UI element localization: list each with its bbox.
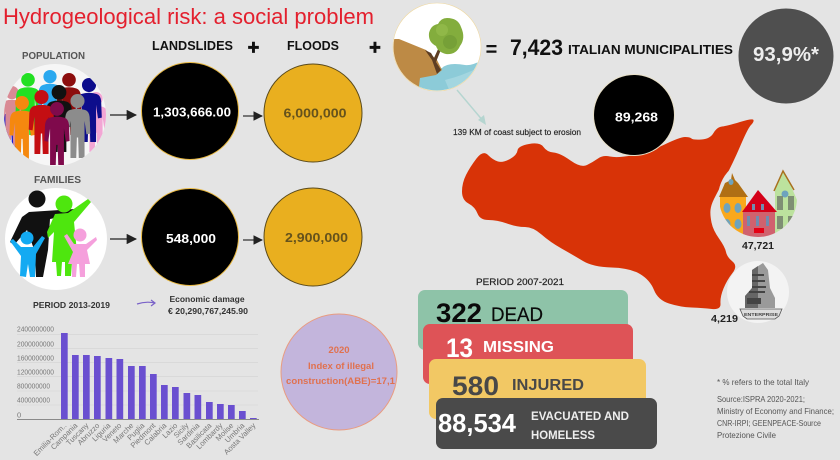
bar chart: economic damage by region	[17, 324, 259, 458]
equals sign: =	[486, 39, 497, 61]
bar chart: economic damage by region: Campania	[49, 420, 80, 452]
circle: families landslides: 548,000	[166, 231, 216, 246]
circle: illegal construction index: construction(ABE)=17,1	[286, 376, 396, 387]
card: missing: MISSING	[483, 339, 554, 356]
stat: Italian municipalities	[510, 35, 733, 60]
bar chart: economic damage by region: Veneto	[101, 421, 123, 444]
label: families: FAMILIES	[34, 174, 81, 186]
note and sources	[717, 378, 834, 440]
card: evacuated and homeless: EVACUATED AND	[531, 409, 629, 423]
bar chart: economic damage by region: Piedmont	[129, 420, 158, 450]
circle: illegal construction index	[281, 314, 397, 430]
map: Sicily	[462, 119, 754, 309]
icon: enterprise building	[727, 261, 789, 323]
bar chart: economic damage by region: Sardinia	[176, 420, 202, 447]
card: evacuated and homeless	[436, 398, 657, 449]
heading: period 2013-2019: PERIOD 2013-2019	[33, 300, 110, 310]
arrow: erosion callout	[457, 90, 486, 125]
circle: families landslides	[142, 188, 238, 286]
bar chart: economic damage by region: Puglia	[125, 420, 147, 442]
bar chart: economic damage by region: 800000000	[17, 382, 50, 390]
stat: Italian municipalities: 7,423	[510, 35, 563, 60]
card: injured: 580	[452, 371, 499, 401]
icon: family	[5, 188, 107, 290]
circle: population floods: 6,000,000	[284, 106, 346, 120]
value: enterprise: 4,219	[711, 314, 738, 325]
card: injured: INJURED	[512, 377, 584, 394]
circle: illegal construction index: 2020	[328, 345, 350, 356]
bar chart: economic damage by region: Lazio	[160, 421, 179, 440]
circle: population landslides	[142, 62, 238, 160]
card: dead: DEAD	[491, 305, 543, 326]
stat: Italian municipalities: ITALIAN MUNICIPALITIES	[568, 42, 733, 57]
card: evacuated and homeless: 88,534	[438, 408, 517, 438]
arrow: families to landslides	[110, 238, 136, 240]
icon: coastal erosion tree	[390, 3, 482, 95]
circle: population landslides: 1,303,666.00	[153, 104, 231, 120]
bar chart: economic damage by region: Abruzzo	[76, 421, 101, 447]
heading: floods: FLOODS	[287, 38, 339, 53]
circle: Sicily population	[593, 74, 675, 156]
bar chart: economic damage by region: Umbria	[223, 420, 247, 445]
label: population: POPULATION	[22, 50, 85, 62]
bar chart: economic damage by region: 0	[17, 410, 21, 420]
circle: population floods	[264, 64, 362, 162]
bar chart: economic damage by region: Emilia-Rom..	[32, 421, 68, 458]
arrow: landslides to floods	[243, 115, 262, 117]
card: missing	[423, 324, 633, 384]
heading: period 2007-2021: PERIOD 2007-2021	[476, 277, 564, 288]
circle: percentage	[738, 8, 834, 104]
note and sources: * % refers to the total Italy	[717, 378, 810, 387]
bar chart: economic damage by region: Calabria	[142, 420, 169, 447]
card: dead: 322	[436, 298, 482, 328]
icon: population crowd	[0, 64, 108, 166]
circle: families floods: 2,900,000	[285, 230, 348, 245]
arrow: population to landslides	[110, 114, 136, 116]
note and sources: Protezione Civile	[717, 431, 776, 440]
text: economic damage	[168, 294, 248, 316]
bar chart: economic damage by region: 1600000000	[17, 354, 54, 362]
bar chart: economic damage by region: Aosta Valley	[222, 421, 258, 457]
card: missing: 13	[446, 333, 473, 363]
circle: illegal construction index: Index of illegal	[308, 361, 374, 372]
bar chart: economic damage by region: 1200000000	[17, 368, 54, 376]
bar chart: economic damage by region: Marche	[111, 421, 135, 445]
bar chart: economic damage by region: Basilicata	[184, 420, 214, 450]
bar chart: economic damage by region: Lombardy	[194, 421, 225, 451]
icon: houses	[718, 170, 797, 237]
circle: Sicily population: 89,268	[615, 110, 658, 124]
card: injured	[429, 359, 646, 419]
bar chart: economic damage by region: 2000000000	[17, 340, 54, 348]
plus sign: +	[369, 37, 381, 59]
text: economic damage: Economic damage	[169, 294, 245, 304]
value: houses: 47,721	[742, 241, 774, 252]
circle: families floods	[264, 188, 362, 286]
bar chart: economic damage by region: Tuscany	[64, 421, 91, 447]
title: Hydrogeological risk: a social problem	[3, 4, 374, 29]
text: coast erosion: 139 KM of coast subject to erosion	[453, 127, 581, 137]
plus sign: +	[248, 37, 259, 59]
note and sources: Ministry of Economy and Finance;	[717, 407, 834, 416]
arrow: landslides to floods families	[243, 239, 262, 241]
note and sources: CNR-IRPI; GEENPEACE-Source	[717, 419, 821, 428]
arrow: purple	[137, 300, 155, 306]
heading: landslides: LANDSLIDES	[152, 38, 233, 53]
bar chart: economic damage by region: 2400000000	[17, 324, 54, 334]
text: economic damage: € 20,290,767,245.90	[168, 306, 248, 316]
icon: enterprise building: ENTERPRISE	[744, 312, 779, 318]
note and sources: Source:ISPRA 2020-2021;	[717, 395, 805, 404]
card: evacuated and homeless: HOMELESS	[531, 428, 595, 442]
bar chart: economic damage by region: Sicily	[172, 421, 191, 440]
card: dead	[418, 290, 628, 350]
circle: percentage: 93,9%*	[753, 44, 819, 66]
bar chart: economic damage by region: Liguria	[90, 420, 113, 443]
bar chart: economic damage by region: Molise	[214, 421, 235, 443]
bar chart: economic damage by region: 400000000	[17, 396, 50, 404]
